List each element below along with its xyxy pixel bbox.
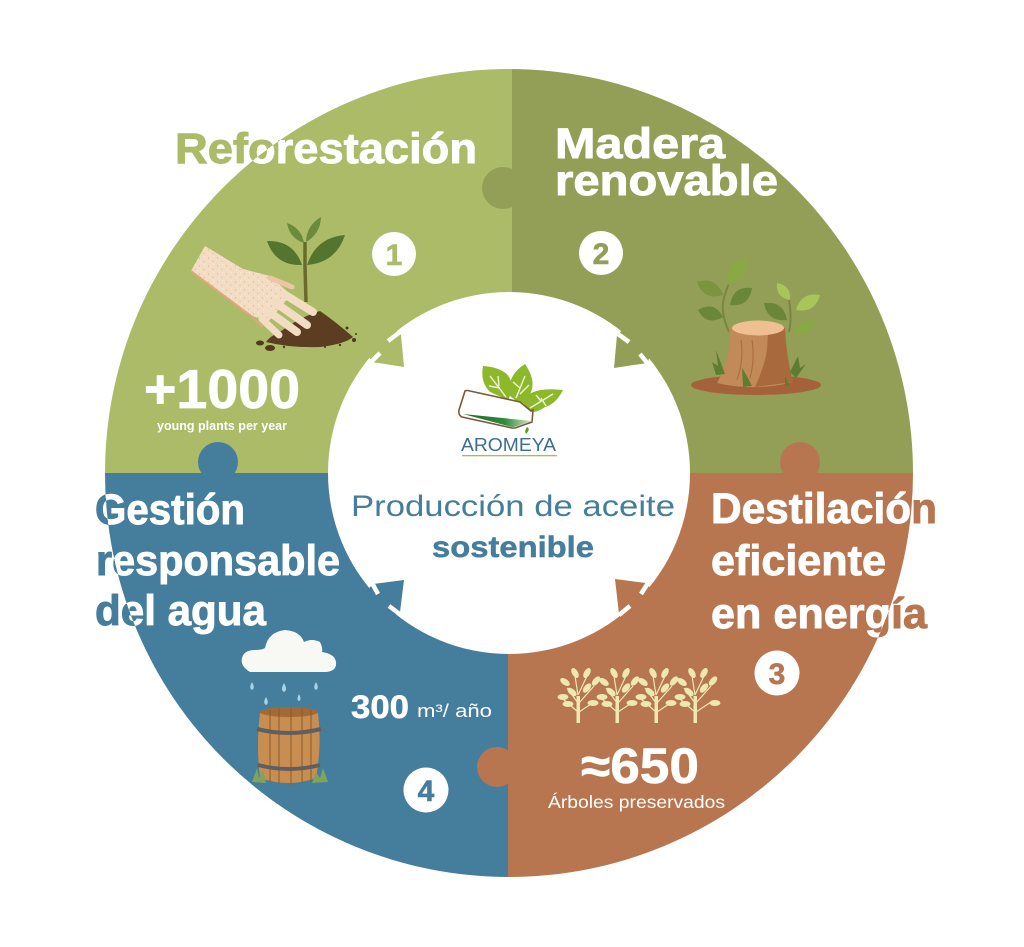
puzzle knob: right — [780, 442, 820, 473]
number badge 2 — [579, 231, 623, 275]
panel: gestión del agua quadrant — [100, 473, 508, 886]
panel: quadrant disc — [100, 60, 922, 886]
heading: Gestión responsable del agua: del agua — [95, 587, 267, 635]
stat: ≈650 árboles preservados: ≈650 — [581, 738, 699, 794]
arrow: madera to centre — [614, 320, 658, 368]
number badge 2: 2 — [593, 238, 609, 271]
number badge 4: 4 — [418, 775, 435, 808]
centre title: sostenible — [432, 531, 594, 564]
heading: Destilación eficiente en energía — [711, 485, 937, 638]
stat: ≈650 árboles preservados — [548, 738, 725, 812]
heading: Madera renovable: Madera — [555, 120, 726, 168]
arrow: agua to centre — [353, 580, 404, 625]
centre title: Producción de aceite — [351, 490, 675, 523]
heading: Destilación eficiente en energía: Destilación — [711, 485, 937, 533]
puzzle knob: left — [198, 442, 238, 473]
heading: Destilación eficiente en energía: eficiente — [711, 537, 886, 585]
panel: reforestación quadrant — [100, 60, 512, 473]
logo: Aromeya — [459, 364, 563, 456]
centre title — [351, 490, 675, 564]
heading: Gestión responsable del agua: responsable — [96, 537, 340, 585]
stat: 300 m³/ año: 300 — [351, 689, 409, 725]
heading: Madera renovable: renovable — [555, 157, 778, 205]
heading: Gestión responsable del agua — [95, 486, 340, 635]
heading: Gestión responsable del agua: Gestión — [95, 486, 245, 534]
stat: +1000 young plants per year: young plants per year — [157, 419, 287, 433]
arrow: destilación to centre — [615, 579, 665, 625]
logo: Aromeya: AROMEYA — [461, 435, 556, 455]
puzzle knob: top — [482, 167, 512, 209]
panel: madera renovable quadrant — [512, 60, 922, 473]
stat: 300 m³/ año — [351, 689, 492, 725]
puzzle knob: bottom — [477, 747, 508, 787]
centre circle — [328, 292, 690, 654]
number badge 4 — [404, 768, 448, 812]
icon: row of four trees — [558, 667, 720, 723]
heading: Destilación eficiente en energía: en energía — [711, 590, 928, 638]
stat: +1000 young plants per year: +1000 — [144, 358, 300, 420]
number badge 1 — [372, 232, 416, 276]
heading: Madera renovable — [555, 120, 778, 205]
panel: destilación quadrant — [508, 473, 922, 886]
heading: Reforestación: Reforestación — [175, 125, 477, 173]
number badge 3 — [754, 650, 800, 696]
number badge 3: 3 — [769, 658, 785, 691]
icon: hand planting sapling — [191, 217, 357, 351]
number badge 1: 1 — [386, 239, 402, 272]
stat: ≈650 árboles preservados: Árboles preservados — [548, 792, 725, 812]
icon: tree stump with sprouts — [691, 257, 821, 395]
arrow: reforestación to centre — [360, 320, 404, 367]
stat: 300 m³/ año: m³/ año — [417, 701, 492, 721]
icon: rain cloud over barrel — [242, 630, 336, 785]
